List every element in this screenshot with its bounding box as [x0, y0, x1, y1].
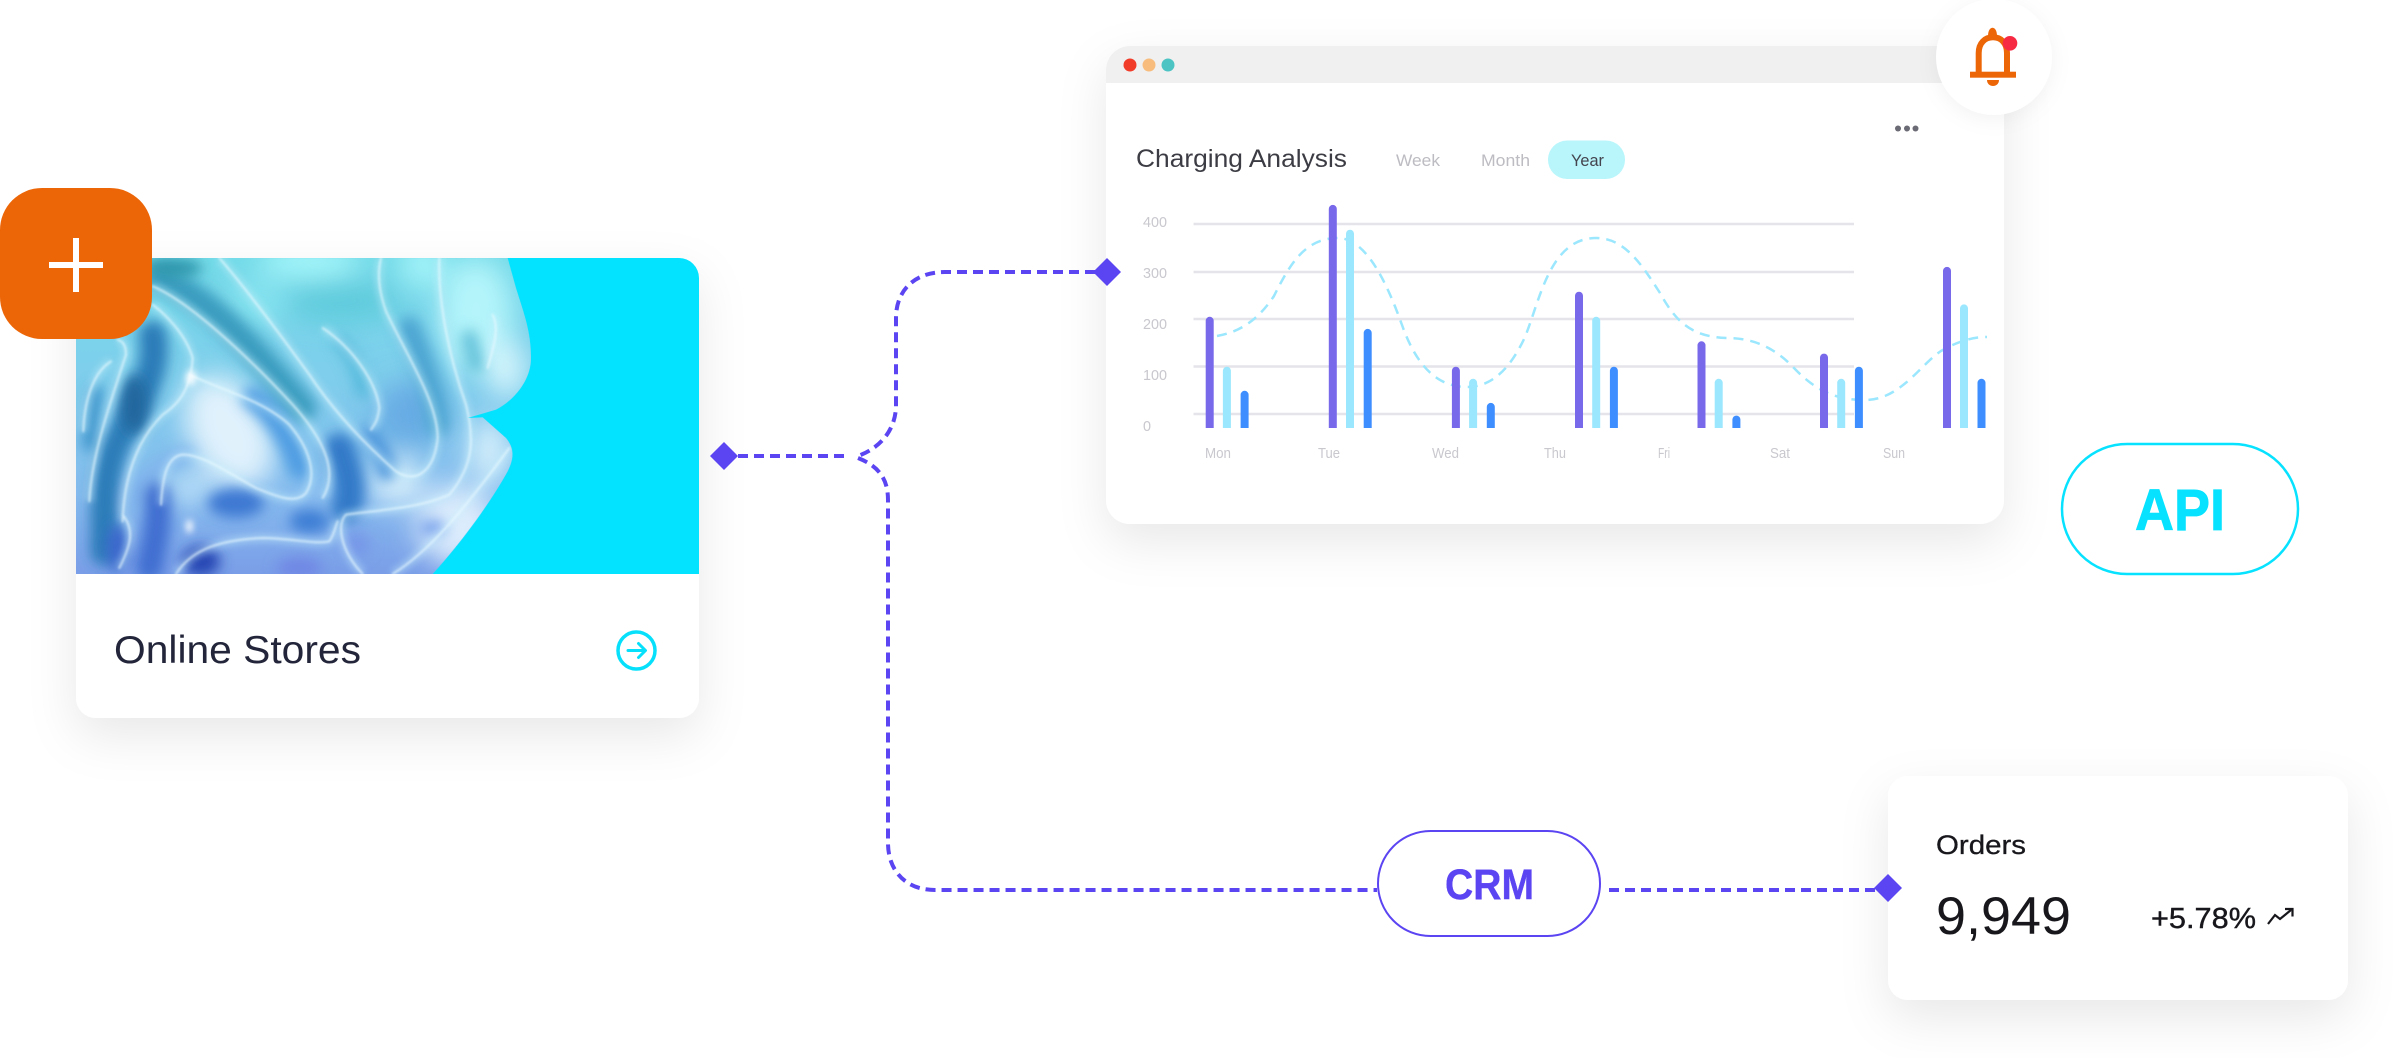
orders value: 9,949: [1936, 887, 2071, 946]
connector: online stores to CRM: [858, 458, 1377, 890]
pill: CRM: [1378, 831, 1600, 936]
chart: grouped bars with dashed trend line: Sun: [1883, 445, 1905, 462]
chart: grouped bars with dashed trend line: Tue: [1318, 445, 1340, 462]
more menu dots: [1895, 126, 1918, 132]
connector node: left diamond: [710, 442, 738, 470]
chart: grouped bars with dashed trend line: Thu: [1544, 445, 1566, 462]
chart: grouped bars with dashed trend line: Sat: [1770, 445, 1791, 462]
chart: grouped bars with dashed trend line: 400: [1143, 214, 1167, 231]
card label: Online Stores: Online Stores: [114, 629, 361, 672]
period tabs: Year: [1571, 151, 1604, 170]
panel: orders card: [1888, 776, 2348, 1000]
pill: API: [2062, 444, 2298, 574]
orders label: Orders: [1936, 830, 2026, 860]
chart: grouped bars with dashed trend line: Wed: [1432, 445, 1459, 462]
icon: orange plus button: [0, 188, 152, 339]
panel: charging analysis dashboard: [1106, 46, 2004, 524]
orders change: +5.78%: [2151, 903, 2256, 935]
icon: arrow in circle: [618, 632, 655, 669]
chart: grouped bars with dashed trend line: 200: [1143, 316, 1167, 333]
connector: online stores to dashboard: [738, 272, 1095, 456]
pill: API: API: [2135, 478, 2225, 543]
pill: CRM: CRM: [1445, 861, 1534, 909]
chart: grouped bars with dashed trend line: 100: [1143, 367, 1167, 384]
panel: online stores card: [76, 241, 699, 718]
chart: grouped bars with dashed trend line: 300: [1143, 265, 1167, 282]
card image: liquid glass on cyan: [76, 241, 699, 579]
period tabs: Week: [1396, 151, 1441, 170]
icon: trend arrow: [2268, 909, 2292, 924]
chart title: Charging Analysis: [1136, 145, 1347, 173]
chart: grouped bars with dashed trend line: 0: [1143, 418, 1151, 435]
connector node: orders diamond: [1874, 874, 1902, 902]
connector node: dashboard diamond: [1093, 258, 1121, 286]
chart: grouped bars with dashed trend line: [1143, 205, 1987, 462]
chart: grouped bars with dashed trend line: Mon: [1205, 445, 1231, 462]
period tabs: Month: [1481, 151, 1530, 170]
chart: grouped bars with dashed trend line: Fri: [1658, 445, 1670, 462]
window title bar: [1106, 46, 2004, 83]
period tabs: [1396, 140, 1625, 179]
connector: CRM to orders: [1609, 888, 1876, 892]
icon: notification bell: [1936, 0, 2052, 115]
